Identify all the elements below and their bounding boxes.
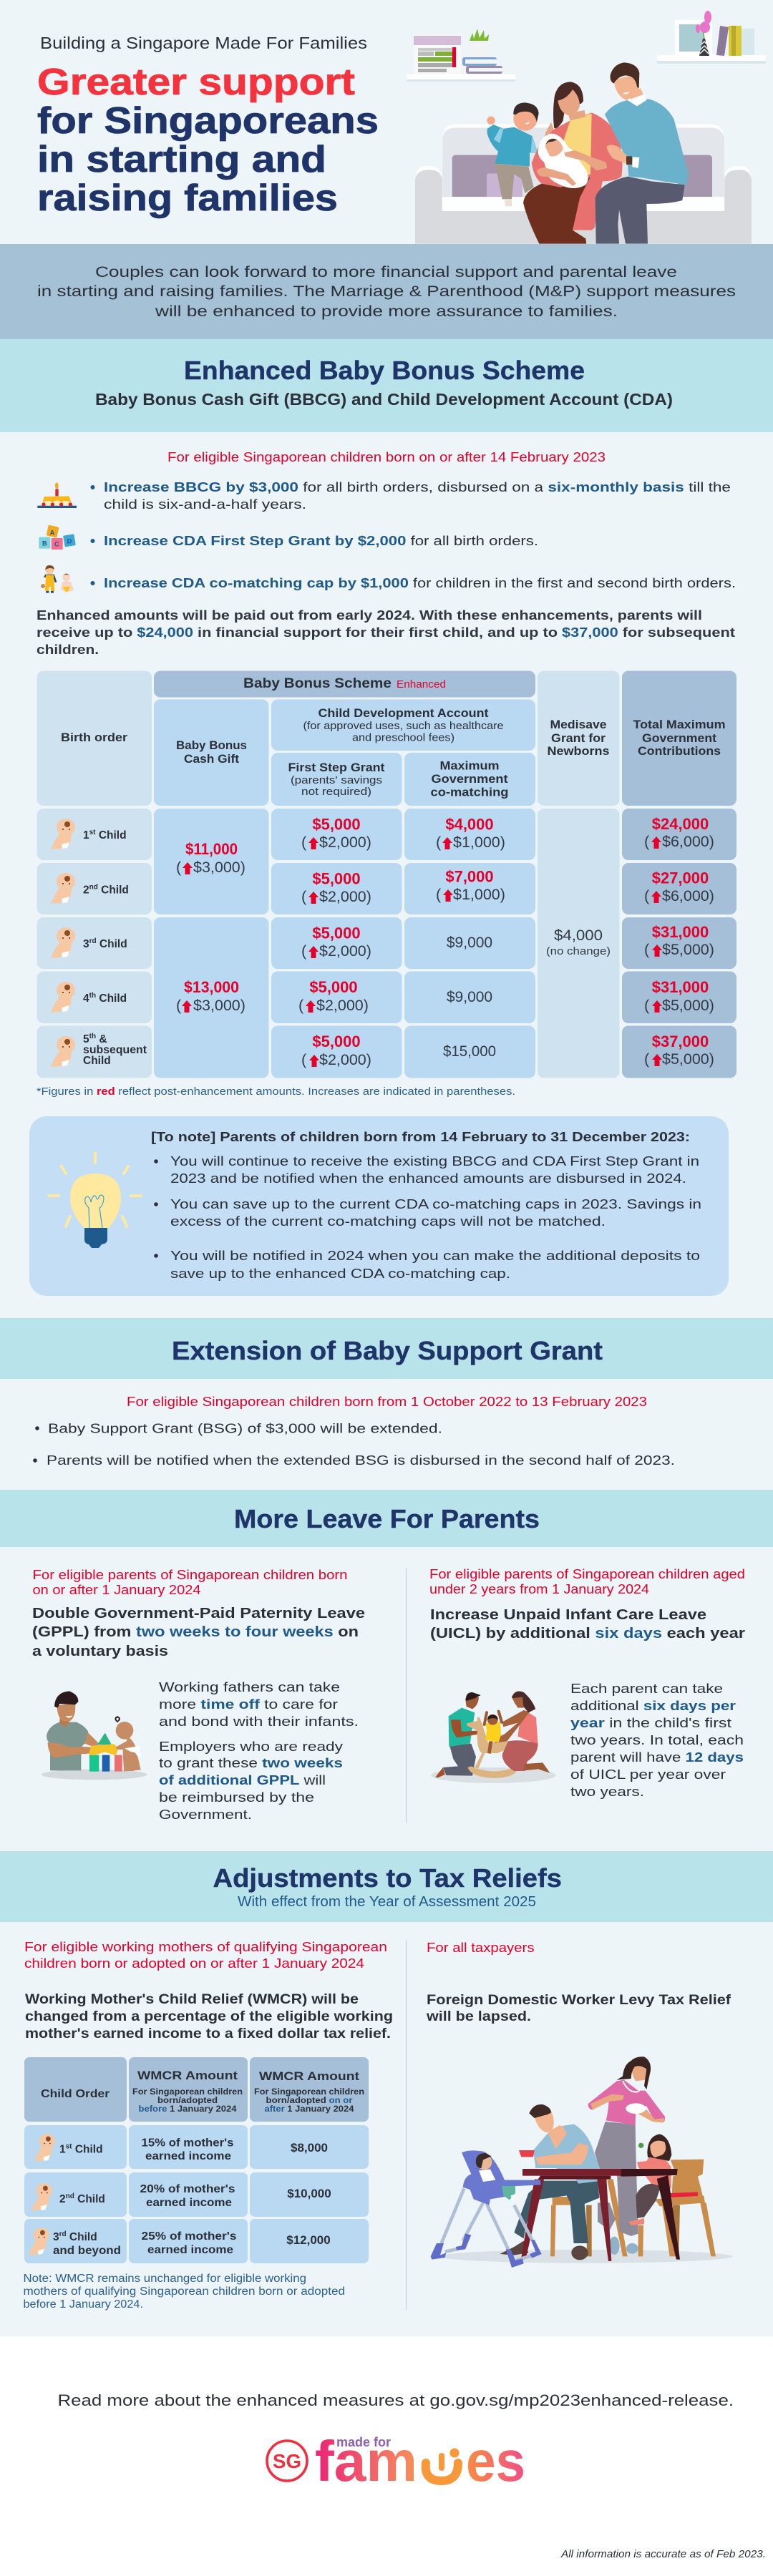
callout bullet 1: You will continue to receive the existing BBCG and CDA First Step Grant in [170, 1154, 699, 1169]
row: 1st child: 15% of mother's [142, 2137, 233, 2150]
row: 5th and subsequent child: $37,000 [652, 1033, 709, 1050]
row: 1st child: ( [301, 834, 307, 851]
row: 4th child: $5,000) [662, 997, 714, 1014]
row: 2nd child: earned income [146, 2197, 232, 2209]
row: 2nd child: $5,000 [312, 870, 361, 887]
measure heading: (UICL) by additional six days each year [430, 1626, 745, 1641]
logo SG roundel [267, 2441, 307, 2481]
paragraph: paid out from early 2024 [37, 608, 735, 657]
row: 3rd child: ( [301, 942, 307, 960]
intro text: will be enhanced to provide more assurance to families. [155, 303, 618, 320]
row: 4th child: Child [96, 992, 127, 1005]
row: 3rd child and beyond: and beyond [53, 2245, 121, 2257]
text block: working fathers: Employers who are ready [159, 1739, 344, 1754]
header cells: Baby Bonus [176, 738, 247, 752]
row: 5th and subsequent child: $5,000) [662, 1050, 714, 1068]
callout bullet 2: You can save up to the current CDA co-matching caps in 2023. Savings in [170, 1197, 701, 1211]
text block: working fathers: and bond with their infants. [159, 1714, 359, 1729]
spanning cells: cash gift and Medisave: ( [176, 997, 182, 1014]
row: 1st child: st [66, 2142, 72, 2151]
eligibility text: For eligible Singaporean children born from 1 October 2022 to 13 February 2023 [127, 1394, 647, 1409]
eligibility text: For eligible parents of Singaporean children aged [429, 1567, 745, 1581]
text block: each parent: two years. [570, 1784, 644, 1799]
measure text: changed from a percentage of the eligible working [25, 2009, 393, 2024]
footer note: All information is accurate as of Feb 2023. [560, 2548, 766, 2560]
row: 4th child: ( [298, 997, 304, 1014]
row: 3rd child and beyond: 3 [53, 2231, 59, 2243]
left column: paternity leave [32, 1568, 365, 1822]
row: 2nd child: $7,000 [445, 867, 494, 886]
row: 1st child [24, 2125, 369, 2169]
table: WMCR amounts [24, 2057, 369, 2263]
row: 2nd child: ( [436, 886, 442, 903]
row: 3rd child and beyond: earned income [147, 2244, 233, 2256]
text block: each parent: Each parent can take [570, 1681, 723, 1696]
father [595, 62, 689, 244]
left column: WMCR [23, 1939, 393, 2311]
panel: More Leave For Parents [0, 1490, 773, 1823]
row: 1st child: 1 [59, 2144, 66, 2155]
header cells: Enhanced [397, 678, 446, 691]
row: 5th and subsequent child: ( [644, 1050, 650, 1068]
spanning cells: cash gift and Medisave: $13,000 [184, 978, 239, 996]
header row: For Singaporean children [132, 2087, 243, 2097]
row: 2nd child: ( [644, 887, 650, 904]
row: 2nd child [37, 863, 736, 914]
row: 4th child: $9,000 [447, 989, 492, 1005]
row: 4th child: $5,000 [309, 978, 358, 996]
header cells: Child Development Account [318, 706, 489, 720]
icon: two children [41, 565, 74, 593]
row: 2nd child: Child [74, 2193, 105, 2205]
title: Greater support [37, 62, 355, 103]
row: 3rd child and beyond: 25% of mother's [142, 2230, 236, 2243]
illustration: wall shelf with calendar, plant and books [407, 29, 515, 82]
text block: working fathers: to grant these two weeks [159, 1755, 343, 1770]
text: read more link: Read more about the enhanced measures at go.gov.sg/mp2023enhanced-release. [57, 2391, 734, 2409]
row: 3rd child: rd [89, 937, 97, 945]
row: 5th and subsequent child: 5 [83, 1033, 89, 1045]
header cells: co-matching [431, 786, 508, 799]
header cells: Baby Bonus Scheme [243, 676, 392, 691]
right column: levy relief [426, 1940, 732, 2268]
header cells: Government [642, 731, 716, 745]
eligibility text: children born or adopted on or after 1 January 2024 [24, 1956, 364, 1971]
callout heading: [To note] Parents of children born from 14 February to 31 December 2023: [151, 1129, 690, 1144]
header cells: Medisave [550, 718, 607, 731]
header cells: Government [431, 772, 508, 786]
row: 5th and subsequent child: ( [301, 1051, 307, 1068]
row: 1st child: $1,000) [453, 834, 505, 851]
callout bullet 2: excess of the current co-matching caps will not be matched. [170, 1214, 606, 1229]
icon: alphabet blocks: B [42, 540, 47, 547]
callout bullet 3: You will be notified in 2024 when you can make the additional deposits to [170, 1249, 700, 1263]
row: 2nd child: nd [89, 883, 98, 892]
row: 1st child: $8,000 [291, 2141, 328, 2155]
row: 5th and subsequent child: th [89, 1033, 96, 1040]
header row: Child Order [41, 2088, 110, 2100]
row: 2nd child: $2,000) [319, 888, 371, 905]
callout bullet 3 [154, 1249, 700, 1281]
panel: intro band [0, 244, 773, 339]
header row: For Singaporean children [254, 2087, 364, 2097]
row: 2nd child: 20% of mother's [140, 2183, 235, 2195]
header cells: and preschool fees) [352, 731, 454, 744]
right chair [638, 2160, 716, 2256]
logo made for: made for [336, 2435, 391, 2449]
row: 2nd child: ( [301, 888, 307, 905]
text block: each parent: parent will have 12 days [570, 1750, 744, 1765]
header row: before 1 January 2024 [139, 2104, 237, 2114]
header cells: Birth order [61, 731, 127, 744]
header cells: Contributions [638, 744, 721, 758]
row: 2nd child: $6,000) [662, 887, 714, 904]
row: 1st child: $2,000) [319, 834, 371, 851]
text block: working fathers: Working fathers can take [159, 1679, 340, 1694]
row: 3rd child: $2,000) [319, 942, 371, 960]
intro text [37, 264, 736, 320]
header cells [37, 671, 736, 806]
heading: Enhanced Baby Bonus Scheme [184, 356, 585, 385]
spanning cells: cash gift and Medisave: $11,000 [185, 840, 238, 858]
row: 4th child: ( [644, 997, 650, 1014]
eligibility text: under 2 years from 1 January 2024 [429, 1582, 649, 1596]
icon: alphabet blocks: D [67, 537, 72, 545]
text block: working fathers: Government. [159, 1807, 252, 1822]
eligibility text: on or after 1 January 2024 [33, 1583, 200, 1597]
icon: birthday cake [37, 482, 77, 508]
illustration: father playing with baby [42, 1691, 147, 1780]
header cells: Total Maximum [633, 718, 726, 731]
spanning cells: cash gift and Medisave: ( [176, 859, 182, 876]
row: 1st child: ( [644, 833, 650, 850]
row: 3rd child and beyond: $12,000 [286, 2233, 331, 2247]
text block: each parent: additional six days per [570, 1698, 736, 1713]
icon: alphabet blocks: C [54, 541, 59, 548]
sofa [415, 124, 752, 244]
row: 5th and subsequent child [37, 1026, 736, 1078]
heading: Extension of Baby Support Grant [172, 1336, 603, 1365]
measure heading: Increase Unpaid Infant Care Leave [430, 1607, 706, 1623]
text block: working fathers [159, 1679, 359, 1822]
row: 3rd child and beyond [24, 2219, 369, 2263]
spanning cells: cash gift and Medisave: (no change) [546, 945, 611, 957]
row: 3rd child: $5,000) [662, 941, 714, 958]
text block: working fathers: more time off to care for [159, 1697, 338, 1712]
eligibility text: For eligible parents of Singaporean children born [33, 1568, 348, 1582]
header row: born/adopted on or [266, 2095, 353, 2105]
row: 3rd child and beyond: rd [59, 2230, 67, 2238]
spanning cells: cash gift and Medisave [154, 809, 620, 1078]
bullet list item: co-matching cap: Increase CDA co-matching cap by $1,000 for children in the first and second birth orders. [104, 576, 736, 590]
father [500, 2104, 607, 2260]
row: 1st child: st [89, 829, 96, 836]
icon: alphabet blocks [39, 525, 76, 550]
logo SG roundel: SG [273, 2450, 301, 2472]
row: 2nd child: Child [98, 884, 129, 896]
subheading: With effect from the Year of Assessment 2025 [238, 1894, 536, 1910]
row: 4th child: $31,000 [652, 978, 709, 996]
row: 1st child: $5,000 [312, 816, 361, 833]
heading: More Leave For Parents [234, 1504, 540, 1533]
text block: each parent: of UICL per year over [570, 1767, 726, 1782]
header cells: Cash Gift [184, 752, 239, 766]
spanning cells: cash gift and Medisave: $4,000 [554, 927, 603, 944]
table: Baby Bonus Scheme amounts [37, 671, 736, 1098]
measure text [426, 1993, 731, 2024]
header cells: not required) [301, 786, 371, 798]
icon: light bulb [49, 1153, 141, 1248]
header row: WMCR Amount [259, 2069, 359, 2083]
title: in starting and [37, 139, 326, 180]
spanning cells: cash gift and Medisave: $3,000) [193, 859, 245, 876]
child [487, 102, 539, 206]
note: before 1 January 2024. [23, 2298, 143, 2311]
measure heading: (GPPL) from two weeks to four weeks on [32, 1624, 359, 1640]
paragraph: paid out from early 2024: receive up to $24,000 in financial support for their first child, and up to $37,000 for subsequent [37, 625, 735, 640]
header row [24, 2057, 369, 2122]
measure text: Working Mother's Child Relief (WMCR) will be [25, 1992, 359, 2007]
panel: Enhanced Baby Bonus Scheme heading [0, 339, 773, 432]
row: 1st child: $4,000 [445, 816, 494, 833]
high chair with baby [431, 2150, 542, 2268]
header cells: First Step Grant [288, 761, 385, 774]
row: 4th child: 4 [83, 992, 89, 1005]
text block: working fathers: be reimbursed by the [159, 1790, 314, 1805]
eligibility text: For all taxpayers [427, 1940, 534, 1955]
newborn [537, 134, 607, 188]
row: 4th child: $2,000) [316, 997, 369, 1014]
mother [588, 2057, 665, 2255]
bullet list item: First Step Grant: Increase CDA First Step Grant by $2,000 for all birth orders. [104, 534, 538, 548]
row: 1st child: Child [96, 829, 127, 841]
row: 1st child: 1 [83, 829, 89, 841]
panel: hero header [37, 11, 766, 244]
header row: after 1 January 2024 [265, 2104, 354, 2114]
row: 1st child: earned income [145, 2150, 231, 2162]
header row: WMCR Amount [137, 2069, 238, 2082]
panel: Adjustments to Tax Reliefs [0, 1851, 773, 2311]
illustration: wall shelf with frame, vase and books [657, 11, 766, 64]
row: 5th and subsequent child: $15,000 [443, 1043, 496, 1060]
row: 5th and subsequent child: Child [83, 1055, 111, 1067]
callout bullet 2 [154, 1197, 701, 1229]
row: 2nd child: 2 [59, 2193, 66, 2205]
bullet: BSG: Baby Support Grant (BSG) of $3,000 will be extended. [48, 1421, 442, 1435]
eligibility text: For eligible working mothers of qualifying Singaporean [24, 1939, 387, 1954]
row: 1st child: ( [436, 834, 442, 851]
row: 2nd child: $1,000) [453, 886, 505, 903]
row: 3rd child: Child [97, 938, 127, 950]
girl [628, 2134, 671, 2225]
panel: Extension of Baby Support Grant [0, 1318, 773, 1468]
row: 3rd child: $31,000 [652, 923, 709, 941]
row: 1st child [37, 809, 736, 860]
title [37, 62, 379, 219]
measure text: mother's earned income to a fixed dollar tax relief. [25, 2026, 391, 2041]
bullet list item: BBCG [90, 480, 731, 512]
text block: each parent: two years. In total, each [570, 1732, 744, 1747]
logo wordmark: fam [315, 2429, 417, 2493]
table footnote: *Figures in red reflect post-enhancement amounts. Increases are indicated in parentheses. [37, 1085, 515, 1098]
row: 2nd child: nd [66, 2192, 74, 2200]
row: 2nd child: $27,000 [652, 869, 709, 887]
text block: working fathers: of additional GPPL will [159, 1772, 326, 1787]
row: 3rd child: $5,000 [312, 924, 361, 942]
subheading: Baby Bonus Cash Gift (BBCG) and Child Development Account (CDA) [95, 390, 673, 409]
note [23, 2273, 345, 2311]
logo: SG made for families [267, 2429, 525, 2493]
eligibility text [33, 1568, 348, 1597]
row: 3rd child [37, 917, 736, 969]
logo wordmark [315, 2429, 525, 2493]
bullet list item: BBCG: child is six-and-a-half years. [104, 497, 306, 512]
note: mothers of qualifying Singaporean children born or adopted [23, 2285, 345, 2298]
row: 1st child: $24,000 [652, 815, 709, 833]
illustration: parents with child on rocking horse [431, 1692, 556, 1783]
callout bullet 1: 2023 and be notified when the enhanced amounts are disbursed in 2024. [170, 1171, 686, 1186]
row: 5th and subsequent child: $2,000) [319, 1051, 371, 1068]
text block: each parent [570, 1681, 744, 1799]
measure heading [32, 1606, 365, 1659]
heading: Adjustments to Tax Reliefs [213, 1863, 562, 1893]
measure text: Foreign Domestic Worker Levy Tax Relief [427, 1993, 731, 2008]
header cells: (parents' savings [291, 774, 382, 786]
row: 3rd child and beyond: Child [67, 2231, 97, 2243]
right column: infant care leave [429, 1567, 745, 1799]
row: 4th child: th [89, 992, 96, 1000]
kicker text: Building a Singapore Made For Families [40, 34, 367, 52]
panel: to note callout [29, 1116, 729, 1296]
eligibility text [24, 1939, 387, 1971]
paragraph: paid out from early 2024: children. [37, 643, 99, 657]
measure heading: Double Government-Paid Paternity Leave [32, 1606, 365, 1621]
row: 5th and subsequent child: & [96, 1033, 107, 1045]
row: 2nd child: 2 [83, 884, 89, 896]
bullet list item: BBCG: Increase BBCG by $3,000 for all birth orders, disbursed on a six-monthly basis till the [104, 480, 731, 494]
header row: born/adopted [157, 2095, 218, 2105]
row: 2nd child: $10,000 [287, 2187, 331, 2200]
header cells: Grant for [551, 731, 606, 745]
row: 4th child [37, 972, 736, 1023]
title: for Singaporeans [37, 100, 379, 142]
measure text: will be lapsed. [426, 2009, 531, 2024]
eligibility text [429, 1567, 745, 1596]
callout bullet 3: save up to the enhanced CDA co-matching cap. [170, 1267, 510, 1281]
bullet: notification: Parents will be notified when the extended BSG is disbursed in the second half of 2023. [47, 1453, 675, 1468]
text block: each parent: year in the child's first [570, 1715, 731, 1730]
row: 3rd child: 3 [83, 938, 89, 950]
illustration: family on a sofa [415, 62, 752, 244]
header cells: Maximum [439, 758, 500, 773]
intro text: Couples can look forward to more financial support and parental leave [95, 264, 677, 280]
row: 3rd child: $9,000 [447, 935, 492, 951]
row: 1st child: $6,000) [662, 833, 714, 850]
measure heading: a voluntary basis [32, 1644, 168, 1659]
eligibility text: For eligible Singaporean children born on or after 14 February 2023 [167, 449, 606, 464]
header cells: (for approved uses, such as healthcare [303, 720, 504, 732]
illustration: family at dining table [431, 2057, 732, 2268]
measure heading [430, 1607, 745, 1641]
intro text: in starting and raising families. The Marriage & Parenthood (M&P) support measures [37, 283, 736, 300]
row: 1st child: Child [72, 2144, 103, 2155]
row: 5th and subsequent child: subsequent [83, 1044, 147, 1056]
middle chair [550, 2160, 628, 2256]
title: raising families [37, 177, 338, 219]
callout bullet 1 [154, 1154, 699, 1186]
measure text [25, 1992, 393, 2041]
paragraph: paid out from early 2024: Enhanced amounts will be paid out from early 2024. With these enhancements, parents will [37, 608, 702, 623]
header cells: Newborns [547, 744, 610, 758]
logo wordmark: es [466, 2429, 525, 2493]
table [521, 2169, 680, 2261]
row: 2nd child [24, 2172, 369, 2217]
row: 5th and subsequent child: $5,000 [312, 1033, 361, 1050]
spanning cells: cash gift and Medisave: $3,000) [193, 997, 245, 1014]
note: Note: WMCR remains unchanged for eligible working [23, 2273, 306, 2285]
mother [523, 82, 622, 244]
icon: alphabet blocks: A [50, 529, 55, 536]
row: 3rd child: ( [644, 941, 650, 958]
